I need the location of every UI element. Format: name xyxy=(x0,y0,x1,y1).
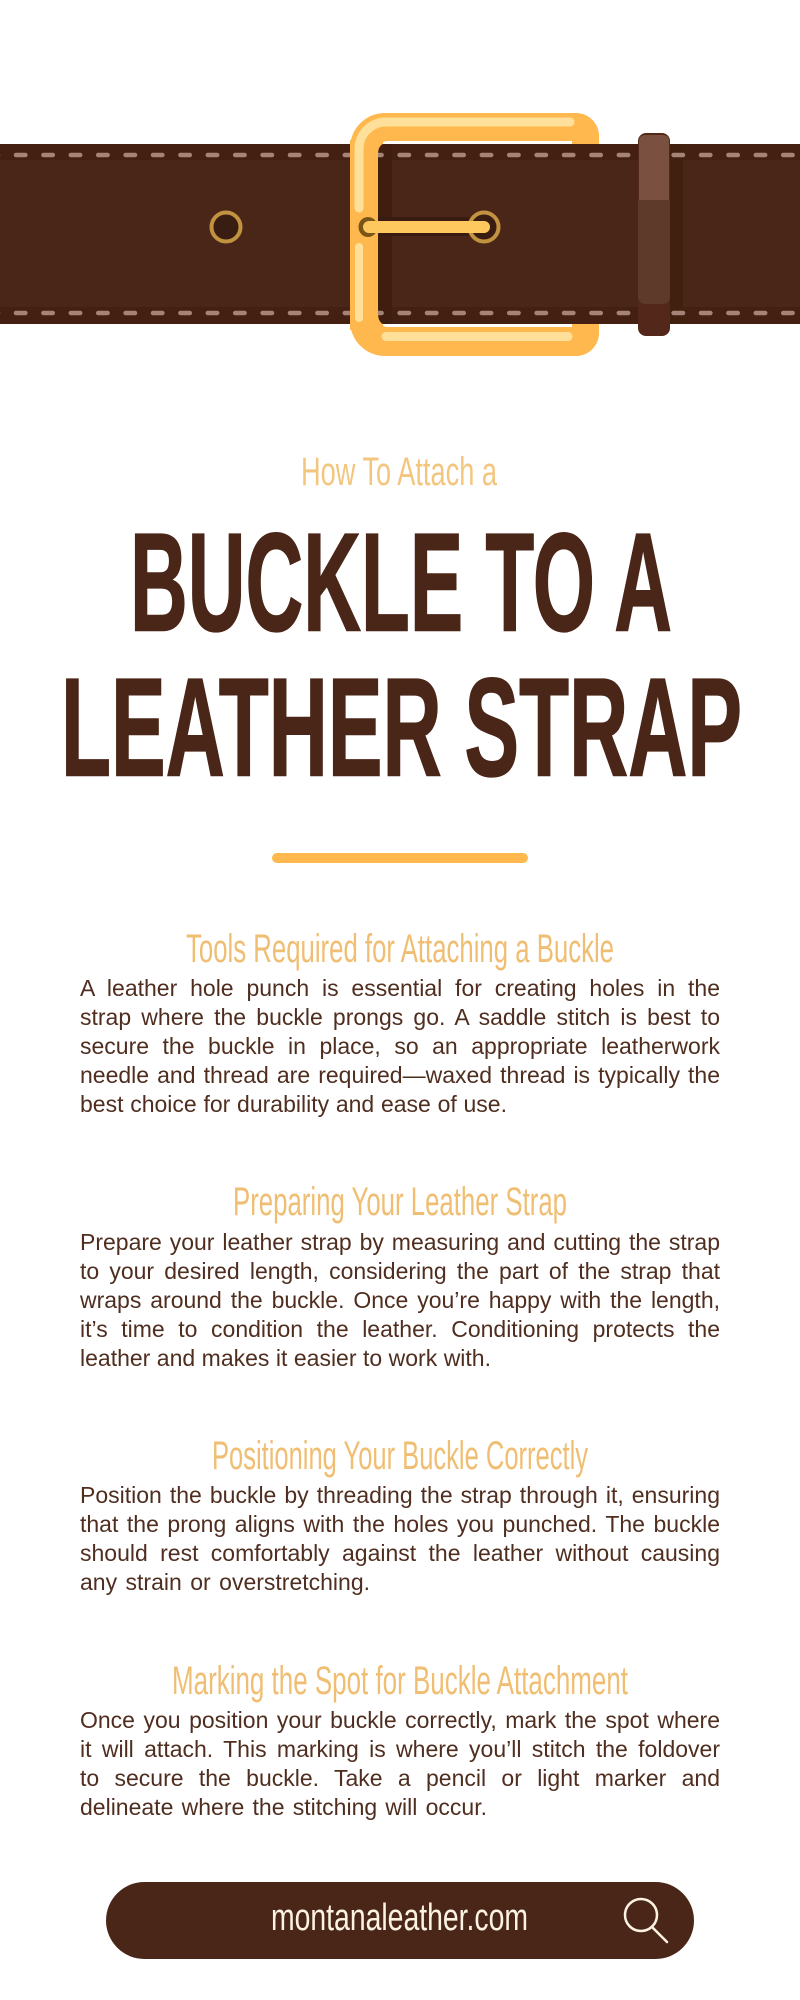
body text: Position the buckle by threading the strap through it, ensuring xyxy=(80,1482,720,1508)
body text: secure the buckle in place, so an appropriate leatherwork xyxy=(80,1032,720,1058)
body text: should rest comfortably against the leather without causing xyxy=(80,1540,720,1566)
body text: that the prong aligns with the holes you punched. The buckle xyxy=(80,1510,720,1536)
website address: montanaleather.com xyxy=(271,1897,528,1939)
body text xyxy=(80,974,720,1117)
body text: to your desired length, considering the part of the strap that xyxy=(80,1258,720,1284)
prong xyxy=(358,217,490,237)
body text: Once you position your buckle correctly, mark the spot where xyxy=(80,1706,720,1732)
body text: to secure the buckle. Take a pencil or light marker and xyxy=(80,1764,720,1790)
subtitle: How To Attach a xyxy=(301,450,498,494)
body text: A leather hole punch is essential for creating holes in the xyxy=(80,974,720,1000)
belt with buckle illustration xyxy=(0,113,800,356)
belt keeper loop xyxy=(638,133,670,336)
body text: strap where the buckle prongs go. A saddle stitch is best to xyxy=(80,1004,720,1030)
section: marking the spot xyxy=(80,1659,720,1820)
body text: any strain or overstretching. xyxy=(80,1568,370,1594)
body text xyxy=(80,1482,720,1595)
buckle left bar xyxy=(350,122,570,336)
belt hole xyxy=(212,212,240,242)
heading: Preparing Your Leather Strap xyxy=(233,1180,567,1224)
body text: it will attach. This marking is where you’ll stitch the foldover xyxy=(80,1736,720,1762)
divider bar xyxy=(272,853,528,863)
body text: it’s time to condition the leather. Conditioning protects the xyxy=(80,1316,720,1342)
body text: Prepare your leather strap by measuring and cutting the strap xyxy=(80,1228,720,1254)
body text: leather and makes it easier to work with. xyxy=(80,1344,491,1370)
body text xyxy=(80,1706,720,1820)
body text: needle and thread are required—waxed thread is typically the xyxy=(80,1062,720,1088)
body text: best choice for durability and ease of use. xyxy=(80,1090,507,1116)
leather strap xyxy=(0,144,800,324)
section: positioning buckle xyxy=(80,1434,720,1595)
heading: Positioning Your Buckle Correctly xyxy=(212,1434,588,1478)
section: preparing strap xyxy=(80,1180,720,1370)
buckle hole with prong xyxy=(378,212,498,242)
body text: delineate where the stitching will occur. xyxy=(80,1794,487,1820)
section: tools required xyxy=(80,927,720,1117)
stitching xyxy=(0,155,800,313)
icon: magnifying glass xyxy=(625,1899,667,1942)
buckle frame xyxy=(350,113,599,356)
body text: wraps around the buckle. Once you’re happy with the length, xyxy=(80,1286,720,1312)
body text xyxy=(80,1228,720,1370)
main title xyxy=(61,504,742,806)
